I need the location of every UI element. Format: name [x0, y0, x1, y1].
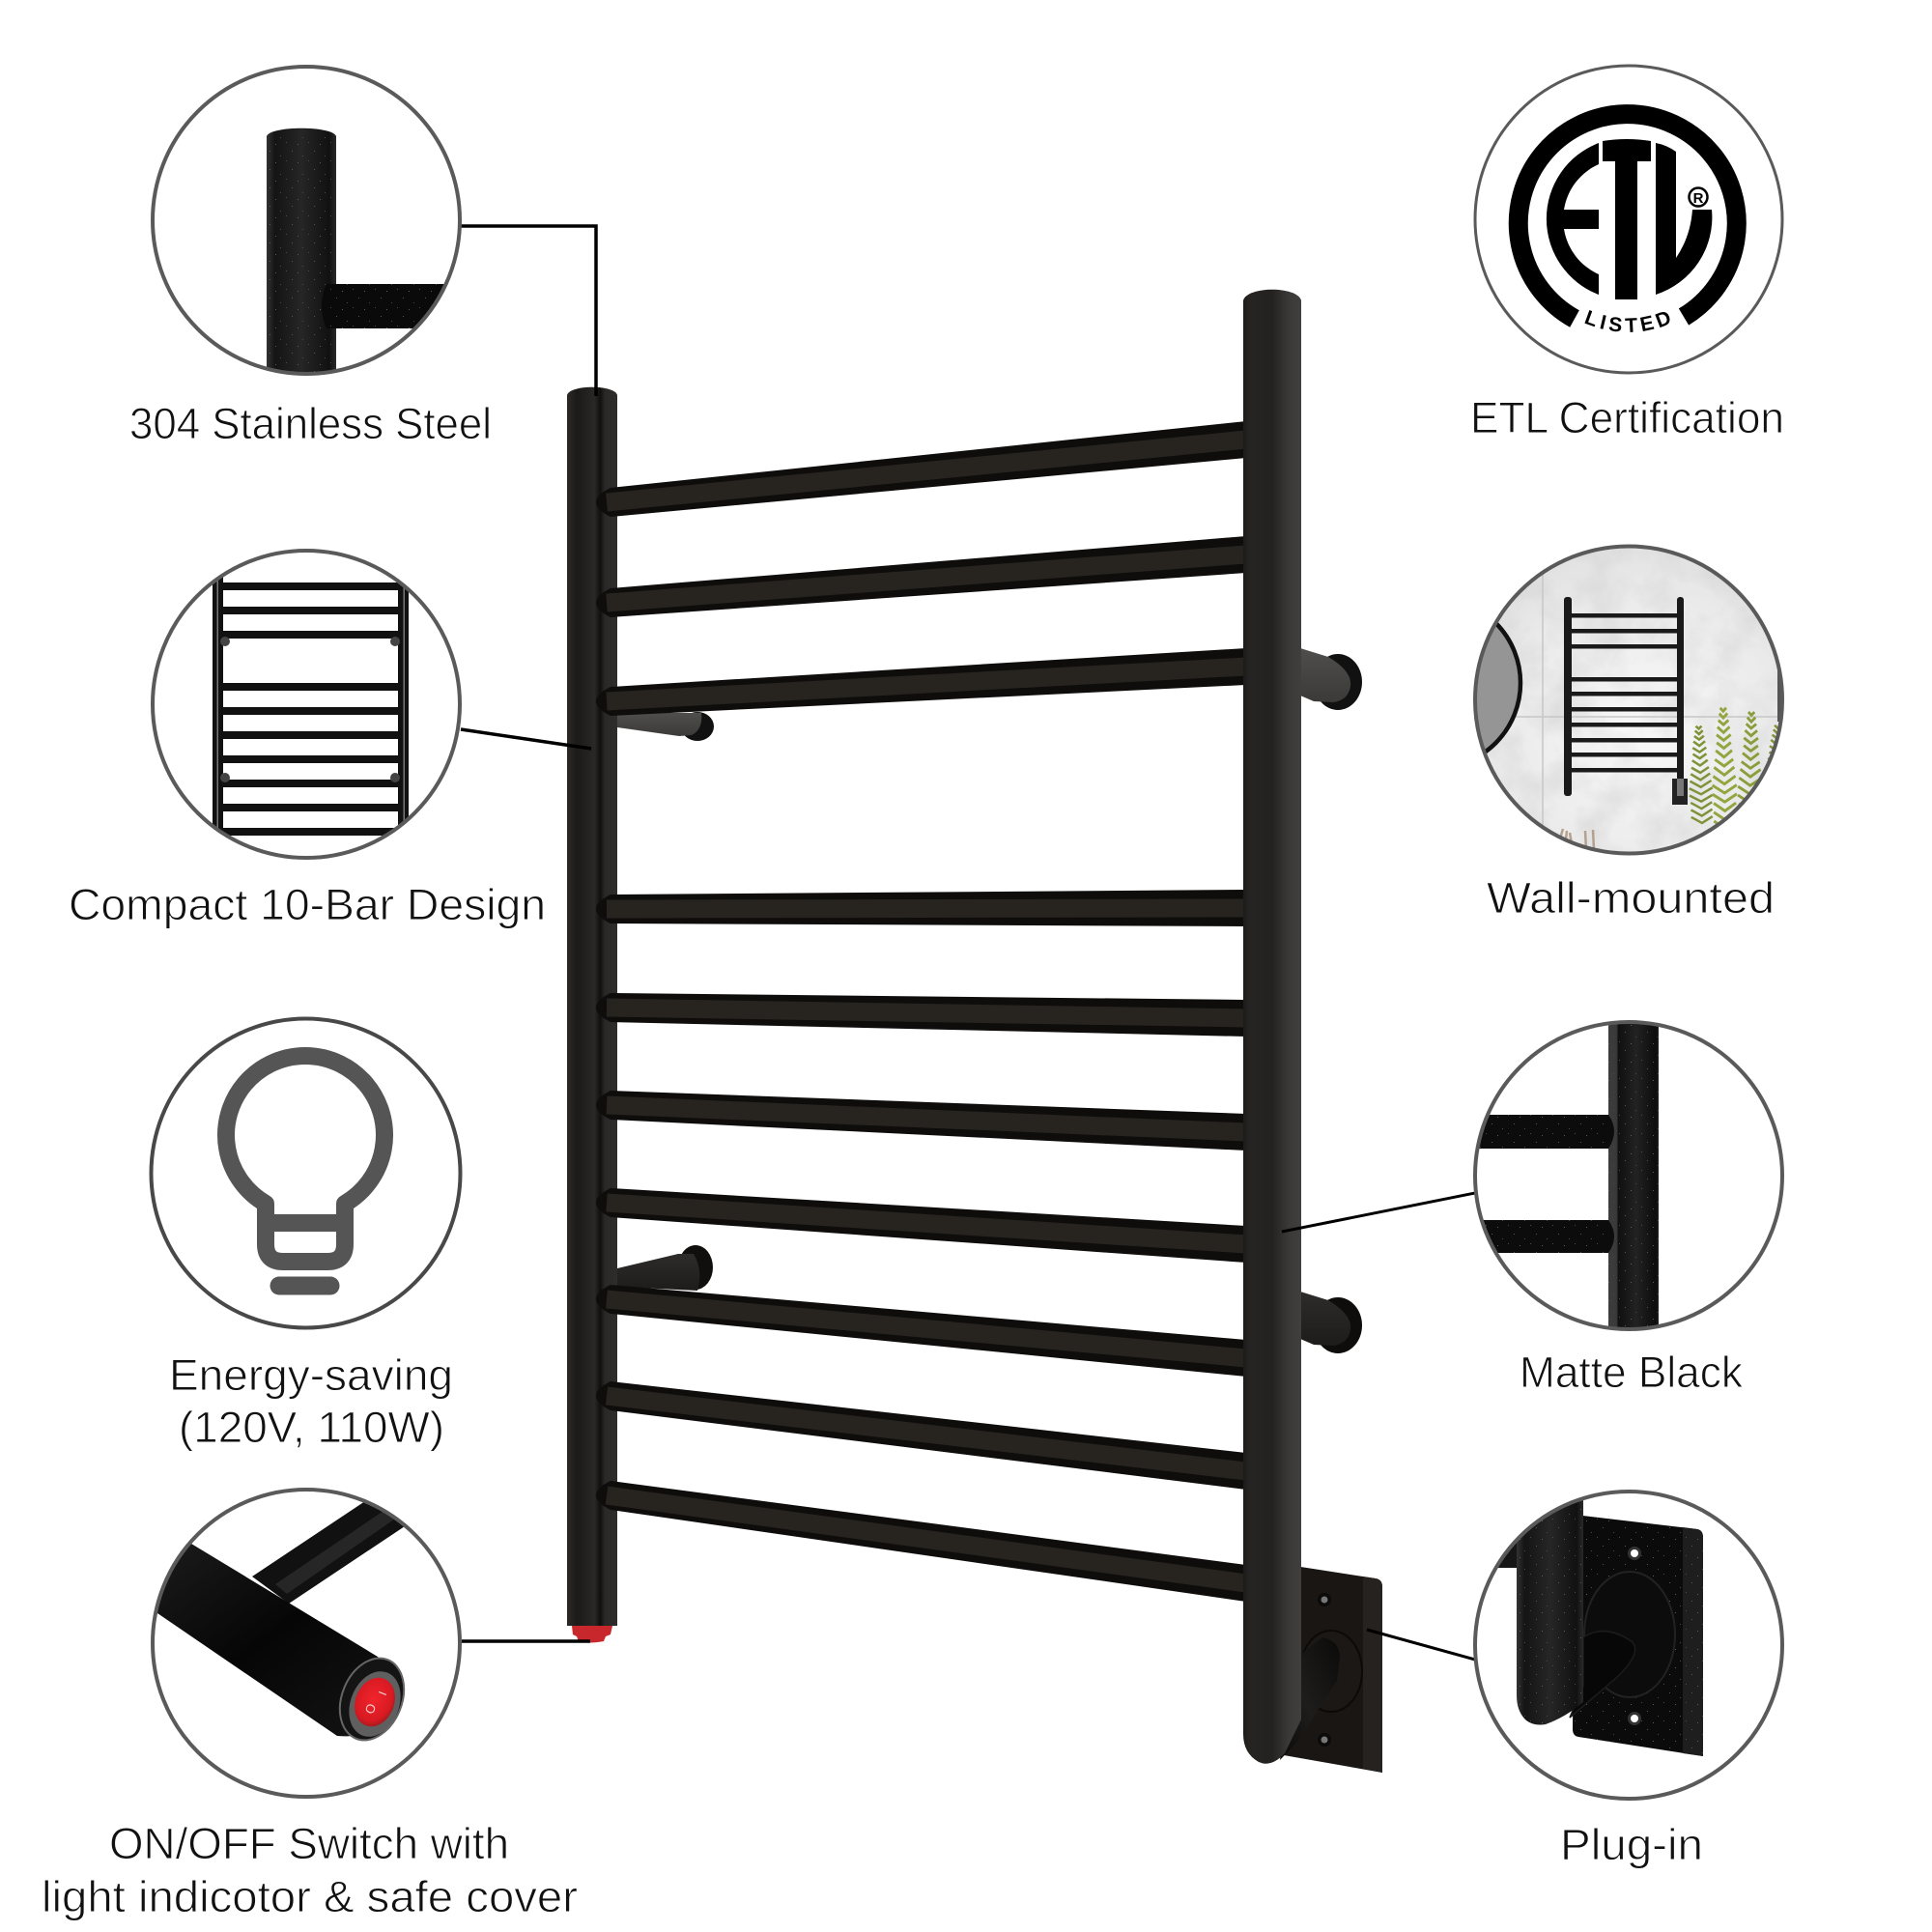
- bar 7: [596, 1188, 1246, 1263]
- icon: wall plate close-up: [1492, 1483, 1703, 1756]
- towel warmer product: [567, 290, 1382, 1773]
- label: Matte Black: [1520, 1348, 1743, 1397]
- standoff: upper right: [1300, 648, 1362, 710]
- bar 8: [596, 1285, 1246, 1377]
- left post: [567, 387, 617, 1626]
- circle outline: [153, 551, 460, 858]
- panel: matte black: [1468, 1014, 1782, 1397]
- icon: switch close-up: I: [376, 1690, 389, 1697]
- panel: wall-mounted: [1473, 545, 1784, 913]
- circle outline: [153, 1490, 460, 1797]
- panel: plug-in: [1475, 1483, 1782, 1869]
- icon: post close-up: [267, 128, 444, 372]
- icon: ETL listed mark: LISTED: [1584, 310, 1669, 332]
- panel: ETL certification: [1470, 64, 1784, 442]
- label: Compact 10-Bar Design: [69, 880, 546, 929]
- connector: matte black: [1282, 1193, 1475, 1232]
- panel: compact 10-bar design: [69, 551, 546, 929]
- red end cap: [572, 1626, 612, 1642]
- connector: stainless steel: [461, 226, 596, 396]
- icon: switch close-up: O: [362, 1701, 379, 1716]
- connector: switch: [462, 1639, 590, 1643]
- icon: matte finish close-up: [1480, 1024, 1659, 1327]
- bar 5: [596, 993, 1246, 1037]
- scene: bathroom wall: [1477, 549, 1780, 852]
- label: Wall-mounted: [1487, 873, 1775, 923]
- bar 4: [596, 890, 1246, 926]
- circle outline: [153, 67, 460, 374]
- icon: switch close-up: [157, 1503, 406, 1741]
- bar 1: [596, 421, 1246, 517]
- icon: light bulb: [226, 1056, 384, 1286]
- circle outline: [151, 1018, 460, 1327]
- circle outline: [1475, 66, 1782, 373]
- right post: [1243, 290, 1301, 1764]
- standoff: upper left: [617, 712, 714, 741]
- panel: on/off switch: [42, 1490, 578, 1921]
- bar 9: [596, 1381, 1246, 1490]
- bar 2: [596, 536, 1246, 617]
- bar 10: [596, 1481, 1246, 1602]
- connector: compact design: [461, 729, 591, 749]
- plant: [1689, 707, 1778, 825]
- bar 3: [596, 648, 1246, 716]
- wall plate: [1256, 1566, 1382, 1773]
- connector: plug-in: [1367, 1630, 1475, 1660]
- standoff: lower left: [617, 1245, 713, 1291]
- label line 2: (120V, 110W): [179, 1403, 444, 1452]
- icon: ETL listed mark: R: [1693, 190, 1704, 207]
- mini towel rack: [1564, 597, 1688, 805]
- circle outline: [1475, 547, 1782, 854]
- circle outline: [1475, 1492, 1782, 1799]
- standoff: lower right: [1300, 1292, 1362, 1353]
- icon: front view rack: [213, 570, 409, 840]
- label line 2: light indicotor & safe cover: [42, 1872, 578, 1921]
- label: Plug-in: [1560, 1820, 1703, 1869]
- label: 304 Stainless Steel: [129, 399, 492, 448]
- panel: 304 stainless steel: [129, 67, 492, 448]
- label line 1: Energy-saving: [169, 1350, 453, 1400]
- label line 1: ON/OFF Switch with: [109, 1819, 509, 1868]
- bar 6: [596, 1091, 1246, 1151]
- label: ETL Certification: [1470, 393, 1784, 442]
- panel: energy-saving: [151, 1018, 460, 1452]
- icon: ETL listed mark: [1509, 104, 1747, 332]
- circle outline: [1475, 1022, 1782, 1329]
